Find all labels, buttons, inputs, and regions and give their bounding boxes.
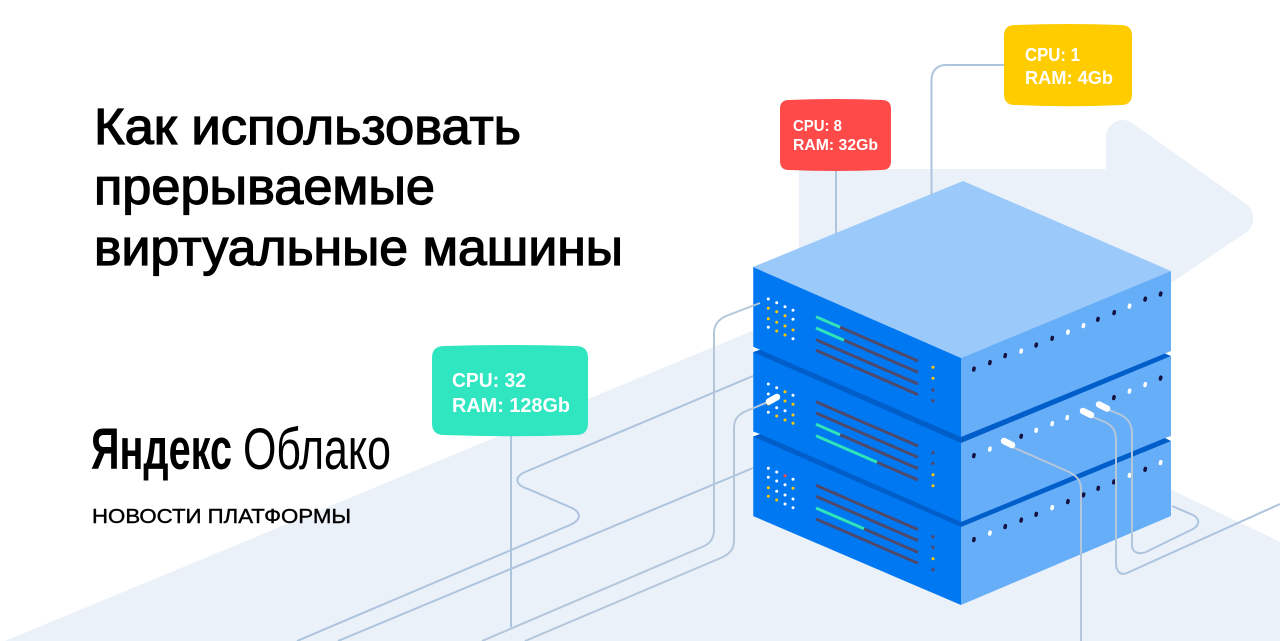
background arrow — [799, 120, 1253, 300]
gap shadows between servers — [753, 350, 1171, 527]
logo: Яндекс Облако — [91, 417, 391, 482]
card: CPU 32 RAM 128Gb: RAM: 128Gb — [452, 395, 570, 417]
server stack — [753, 181, 1171, 605]
title — [94, 98, 623, 276]
load bars — [816, 317, 918, 563]
title: Как использовать — [94, 98, 521, 155]
logo: Яндекс Облако: Яндекс — [91, 417, 232, 482]
front panel yellow LEDs — [768, 308, 933, 559]
card: CPU 1 RAM 4Gb: CPU: 1 — [1025, 45, 1080, 65]
card: CPU 1 RAM 4Gb — [1004, 24, 1132, 106]
subtitle: НОВОСТИ ПЛАТФОРМЫ — [92, 506, 351, 528]
background floor plane — [5, 311, 1280, 641]
gap notches — [753, 347, 1171, 441]
wires in front of the server — [482, 303, 1132, 641]
red LED — [784, 474, 786, 477]
title: виртуальные машины — [94, 219, 623, 276]
card: CPU 32 RAM 128Gb — [432, 345, 588, 436]
title: прерываемые — [94, 158, 435, 215]
card: CPU 8 RAM 32Gb — [780, 99, 891, 171]
card: CPU 32 RAM 128Gb: CPU: 32 — [452, 370, 526, 392]
top face — [753, 181, 1171, 358]
logo: Яндекс Облако: Облако — [243, 417, 391, 482]
light edge of front face — [752, 267, 754, 516]
right face white dots — [990, 305, 1161, 534]
dark status LEDs — [931, 390, 935, 570]
right face dark dots — [974, 293, 1161, 540]
right face — [961, 271, 1171, 605]
card: CPU 1 RAM 4Gb: RAM: 4Gb — [1025, 68, 1113, 88]
card: CPU 8 RAM 32Gb: RAM: 32Gb — [793, 137, 878, 154]
green load bar segments — [816, 317, 877, 529]
cable plugs — [769, 397, 1107, 445]
front panel white LEDs — [768, 299, 793, 508]
wires behind the server — [297, 65, 1280, 641]
front face — [753, 267, 961, 605]
card: CPU 8 RAM 32Gb: CPU: 8 — [793, 118, 842, 135]
